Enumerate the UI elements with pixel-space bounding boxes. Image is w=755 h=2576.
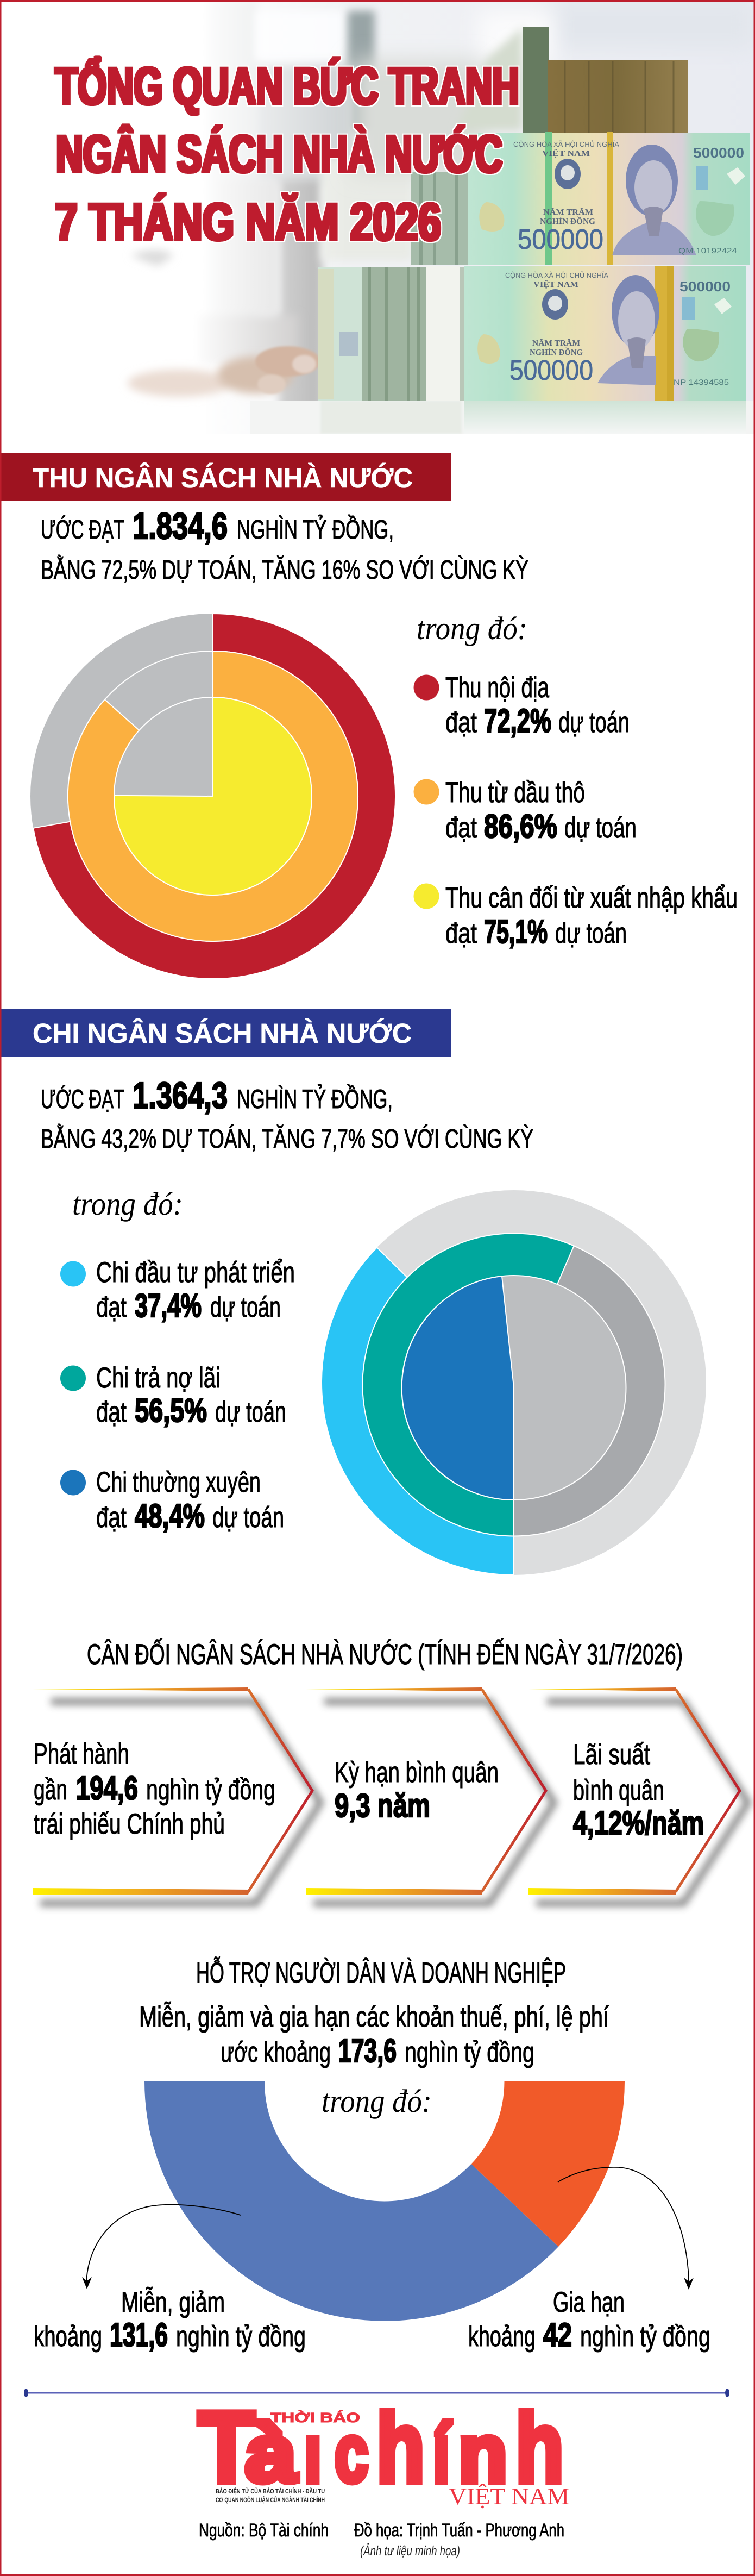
header photo: banknote stacks: CỘNG HÒA XÃ HỘI CHỦ NGHĨA (513, 140, 619, 148)
arrow: right (558, 2167, 694, 2290)
callout: kỳ hạn bình quân: 9,3 năm (335, 1787, 430, 1824)
label: gia hạn (468, 2286, 710, 2353)
chart: chi nested pie (322, 1190, 706, 1575)
label: miễn giảm: khoảng (34, 2321, 102, 2353)
callout: kỳ hạn bình quân (306, 1687, 554, 1903)
header photo: banknote stacks: NĂM TRĂM (532, 338, 580, 348)
logo: thời báo tài chính việt nam: THỜI BÁO (270, 2410, 360, 2425)
legend: thu cân đối từ xuất nhập khẩu: đạt (445, 917, 477, 949)
legend: chi đầu tư phát triển: dự toán (210, 1291, 281, 1323)
header photo: banknote stacks: QM 10192424 (678, 246, 737, 255)
text block: miễn giảm gia hạn: nghìn tỷ đồng (405, 2036, 534, 2068)
legend: chi thường xuyên: dự toán (212, 1502, 284, 1534)
credit: ảnh tư liệu: (Ảnh tư liệu minh họa) (360, 2543, 460, 2559)
callout: lãi suất bình quân: bình quân (573, 1774, 664, 1806)
bottom reflection (250, 401, 755, 434)
legend: thu từ dầu thô: Thu từ dầu thô (445, 777, 585, 809)
text block: thu summary: BẰNG 72,5% DỰ TOÁN, TĂNG 16% SO VỚI CÙNG KỲ (41, 555, 528, 585)
callout: phát hành trái phiếu: 194,6 (76, 1770, 138, 1806)
header photo: banknote stacks: 500000 (679, 278, 731, 295)
header photo: banknote stacks: NGHÌN ĐỒNG (540, 216, 595, 226)
legend: thu nội địa: đạt (445, 706, 477, 739)
callout: lãi suất bình quân: 4,12%/năm (573, 1804, 704, 1841)
header photo: banknote stacks (125, 2, 754, 434)
back stacks (464, 28, 523, 133)
text block: miễn giảm gia hạn (139, 2001, 609, 2069)
legend: thu từ dầu thô (414, 777, 637, 845)
legend: chi thường xuyên (60, 1466, 284, 1534)
divider line (24, 2389, 729, 2397)
legend: thu cân đối từ xuất nhập khẩu: 75,1% (484, 913, 548, 950)
label: gia hạn: Gia hạn (553, 2286, 625, 2318)
title: NGÂN SÁCH NHÀ NƯỚC (56, 124, 502, 184)
legend: thu cân đối từ xuất nhập khẩu (414, 882, 738, 950)
header photo: banknote stacks: VIỆT NAM (533, 279, 578, 289)
label: miễn giảm: Miễn, giảm (121, 2286, 225, 2318)
callout: lãi suất bình quân (528, 1687, 748, 1903)
header photo: banknote stacks: NĂM TRĂM (543, 207, 593, 217)
callout: kỳ hạn bình quân: Kỳ hạn bình quân (335, 1756, 499, 1789)
text block: miễn giảm gia hạn: ước khoảng (221, 2036, 331, 2068)
script label: trong đó: trong đó: (72, 1186, 183, 1222)
middle stack (411, 172, 468, 265)
logo: thời báo tài chính việt nam: í (433, 2407, 451, 2499)
legend: thu từ dầu thô: đạt (445, 812, 477, 844)
callout: phát hành trái phiếu: gần (34, 1774, 67, 1806)
logo: thời báo tài chính việt nam (196, 2408, 569, 2509)
logo: thời báo tài chính việt nam: CƠ QUAN NGÔN LUẬN CỦA NGÀNH TÀI CHÍNH (216, 2496, 325, 2504)
legend: chi trả nợ lãi: Chi trả nợ lãi (96, 1362, 221, 1394)
title: TỔNG QUAN BỨC TRANH (55, 56, 519, 116)
label: miễn giảm: nghìn tỷ đồng (176, 2321, 306, 2353)
callout: phát hành trái phiếu (33, 1687, 320, 1903)
logo: thời báo tài chính việt nam: n (458, 2407, 507, 2499)
credit: nguồn: Nguồn: Bộ Tài chính (199, 2520, 329, 2541)
label: miễn giảm: 131,6 (110, 2316, 168, 2353)
callout: phát hành trái phiếu: nghìn tỷ đồng (146, 1774, 275, 1806)
legend: thu từ dầu thô: dự toán (564, 812, 637, 844)
legend: thu từ dầu thô: 86,6% (484, 808, 557, 845)
arrow: left (82, 2205, 241, 2289)
legend: chi đầu tư phát triển: 37,4% (135, 1287, 202, 1324)
callout: phát hành trái phiếu: trái phiếu Chính phủ (34, 1808, 225, 1840)
legend: chi thường xuyên: 48,4% (135, 1497, 205, 1534)
header photo: banknote stacks: NP 14394585 (674, 378, 729, 386)
logo: thời báo tài chính việt nam: c (335, 2407, 368, 2499)
section heading: thu ngân sách (0, 453, 451, 501)
legend: chi trả nợ lãi: đạt (96, 1396, 127, 1428)
text block: chi summary: ƯỚC ĐẠT (41, 1085, 124, 1114)
header photo: banknote stacks: 500000 (509, 355, 593, 386)
text block: miễn giảm gia hạn: Miễn, giảm và gia hạn các khoản thuế, phí, lệ phí (139, 2001, 609, 2033)
legend: thu nội địa (414, 672, 630, 739)
text block: thu summary (41, 505, 528, 585)
legend: chi trả nợ lãi: 56,5% (135, 1392, 207, 1429)
heading: hỗ trợ người dân: HỖ TRỢ NGƯỜI DÂN VÀ DOANH NGHIỆP (196, 1956, 566, 1989)
legend: chi thường xuyên: Chi thường xuyên (96, 1466, 261, 1498)
text block: thu summary: ƯỚC ĐẠT (41, 515, 124, 545)
label: gia hạn: nghìn tỷ đồng (580, 2321, 710, 2353)
header photo: banknote stacks: CỘNG HÒA XÃ HỘI CHỦ NGHĨA (505, 271, 608, 279)
chart: thu nested pie (30, 614, 395, 979)
text block: chi summary: NGHÌN TỶ ĐỒNG, (237, 1084, 393, 1114)
logo: thời báo tài chính việt nam: à (246, 2407, 297, 2499)
label: gia hạn: 42 (543, 2316, 572, 2353)
script label: trong đó: trong đó: (322, 2083, 432, 2119)
text block: thu summary: NGHÌN TỶ ĐỒNG, (237, 515, 394, 545)
legend: thu nội địa: 72,2% (484, 702, 551, 739)
callout: phát hành trái phiếu: Phát hành (34, 1738, 129, 1770)
bottom stack (318, 267, 362, 401)
legend: chi thường xuyên: đạt (96, 1502, 127, 1534)
callout: lãi suất bình quân: Lãi suất (573, 1739, 650, 1771)
chart: half donut (144, 2081, 625, 2321)
legend: chi trả nợ lãi (60, 1362, 286, 1429)
logo: thời báo tài chính việt nam: i (304, 2407, 322, 2499)
text block: miễn giảm gia hạn: 173,6 (338, 2032, 397, 2069)
header photo: banknote stacks: 500000 (693, 145, 744, 161)
title: 7 THÁNG NĂM 2026 (55, 192, 441, 252)
section heading: chi ngân sách (0, 1009, 451, 1057)
logo: thời báo tài chính việt nam: h (376, 2391, 425, 2503)
logo: thời báo tài chính việt nam: BÁO ĐIỆN TỬ CỦA BÁO TÀI CHÍNH - ĐẦU TƯ (216, 2487, 325, 2495)
script label: trong đó: trong đó: (417, 610, 527, 646)
header photo: banknote stacks: NGHÌN ĐỒNG (530, 347, 583, 357)
legend: thu nội địa: Thu nội địa (445, 672, 549, 704)
section heading: thu ngân sách: THU NGÂN SÁCH NHÀ NƯỚC (33, 462, 413, 493)
legend: thu nội địa: dự toán (558, 706, 630, 739)
text block: chi summary: 1.364,3 (133, 1075, 228, 1116)
logo: thời báo tài chính việt nam: T (198, 2391, 255, 2503)
label: miễn giảm (34, 2286, 306, 2353)
credit: đồ họa: Đồ họa: Trịnh Tuấn - Phương Anh (354, 2520, 564, 2541)
label: gia hạn: khoảng (468, 2321, 536, 2353)
legend: chi trả nợ lãi: dự toán (215, 1396, 286, 1428)
text block: chi summary (41, 1075, 533, 1154)
legend: chi đầu tư phát triển: đạt (96, 1291, 127, 1323)
title (55, 56, 519, 252)
section heading: chi ngân sách: CHI NGÂN SÁCH NHÀ NƯỚC (33, 1018, 412, 1049)
header photo: banknote stacks: 500000 (518, 224, 603, 255)
legend: chi đầu tư phát triển (60, 1256, 295, 1324)
header photo: banknote stacks: VIỆT NAM (542, 148, 590, 158)
legend: thu cân đối từ xuất nhập khẩu: dự toán (555, 917, 627, 949)
logo: thời báo tài chính việt nam: h (515, 2391, 564, 2503)
text block: chi summary: BẰNG 43,2% DỰ TOÁN, TĂNG 7,7% SO VỚI CÙNG KỲ (41, 1124, 533, 1154)
text block: thu summary: 1.834,6 (133, 505, 228, 547)
legend: chi đầu tư phát triển: Chi đầu tư phát triển (96, 1256, 295, 1289)
logo: thời báo tài chính việt nam: VIỆT NAM (449, 2483, 569, 2510)
